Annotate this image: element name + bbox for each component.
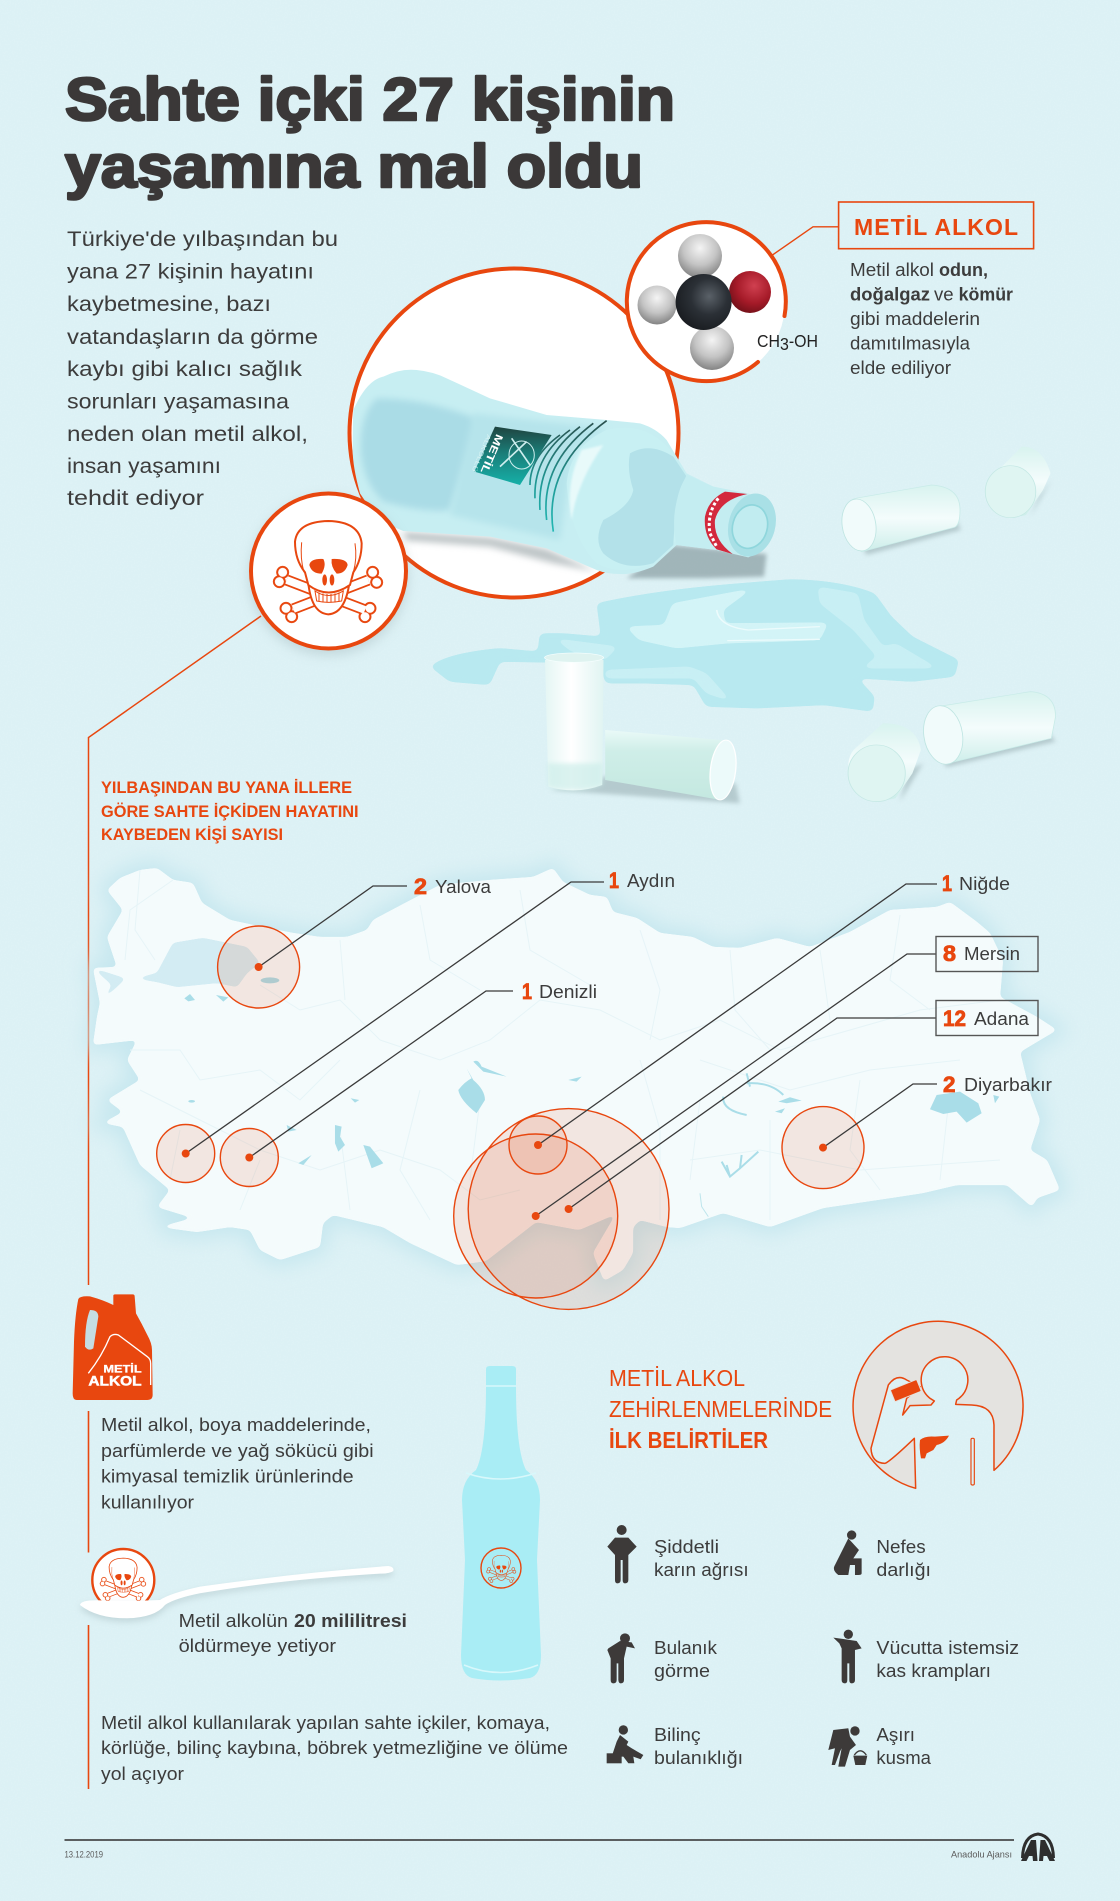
bottle shadow — [403, 532, 767, 578]
text: uses of methyl alcohol: parfümlerde ve yağ sökücü gibi — [101, 1440, 374, 1461]
intro text: kaybı gibi kalıcı sağlık — [67, 358, 303, 381]
bottle stripes — [530, 421, 607, 532]
metil alkol description: Metil alkol — [850, 260, 934, 280]
text: consequences: Metil alkol kullanılarak yapılan sahte içkiler, komaya, — [101, 1712, 550, 1733]
text: 20 millilitres: 20 mililitresi — [294, 1610, 407, 1631]
lakes east — [700, 1073, 999, 1217]
icon: skull badge on bottle — [481, 1548, 521, 1588]
location dots — [182, 963, 827, 1220]
glass: lying behind — [605, 730, 739, 801]
glass: far right short — [985, 447, 1051, 518]
symptoms heading — [609, 1365, 832, 1453]
text: 20 millilitres — [179, 1610, 407, 1656]
text: uses of methyl alcohol: kimyasal temizlik ürünlerinde — [101, 1466, 354, 1486]
icon: orange canister: ALKOL — [88, 1373, 142, 1389]
symptoms heading: ZEHİRLENMELERİNDE — [609, 1396, 832, 1422]
icon: spoon with skull circle — [80, 1549, 393, 1622]
molecule atoms — [638, 234, 771, 370]
icon: blurred vision — [607, 1633, 635, 1683]
footer: Anadolu Ajansı — [951, 1850, 1012, 1860]
text: consequences — [101, 1712, 568, 1784]
symptoms heading: METİL ALKOL — [609, 1365, 745, 1391]
map of Turkey — [93, 868, 1060, 1281]
glass shadows — [550, 480, 1056, 803]
text: uses of methyl alcohol: kullanılıyor — [101, 1492, 194, 1513]
map heading: KAYBEDEN KİŞİ SAYISI — [101, 826, 283, 844]
label: Aydın — [609, 868, 675, 893]
label: Diyarbakır: 2 — [943, 1072, 956, 1097]
title — [65, 66, 675, 200]
glass: lower short — [848, 723, 921, 802]
symptom labels: Nefes — [876, 1537, 926, 1557]
title: yaşamına mal oldu — [65, 133, 643, 200]
symptom labels: görme — [654, 1661, 710, 1681]
circle: Niğde — [509, 1116, 567, 1174]
intro text: tehdit ediyor — [67, 487, 204, 510]
text: consequences: yol açıyor — [101, 1763, 184, 1784]
glasses — [545, 447, 1056, 803]
label: Denizli: Denizli — [539, 982, 597, 1002]
label: Adana — [936, 1000, 1038, 1036]
symptom labels: darlığı — [876, 1560, 931, 1580]
text: uses of methyl alcohol — [101, 1414, 374, 1513]
text: 20 millilitres: Metil alkolün — [179, 1610, 288, 1631]
symptom labels: Bulanık — [654, 1638, 718, 1658]
symptom icons — [607, 1525, 867, 1767]
glass: lower right large — [920, 692, 1056, 766]
text: 20 millilitres: öldürmeye yetiyor — [179, 1635, 336, 1656]
map heading — [101, 779, 359, 844]
icon: confusion — [607, 1725, 643, 1763]
footer — [64, 1834, 1055, 1861]
metil alkol description: ve — [934, 284, 954, 304]
vertical line segments — [88, 1411, 90, 1789]
label: Denizli — [522, 979, 597, 1004]
label: Denizli: 1 — [522, 979, 532, 1004]
bottle label: ALKOLLÜ — [470, 433, 492, 473]
icon: skull — [273, 521, 383, 623]
icon: AA logo — [1021, 1834, 1055, 1861]
icon: person drinking with liver — [853, 1321, 1023, 1488]
label: Yalova: Yalova — [435, 877, 492, 897]
map heading: YILBAŞINDAN BU YANA İLLERE — [101, 779, 352, 797]
circle: Aydın — [157, 1124, 215, 1182]
label: Mersin — [936, 936, 1038, 972]
label: Adana: Adana — [974, 1009, 1030, 1029]
big white circle — [350, 268, 678, 598]
intro text: yana 27 kişinin hayatını — [67, 260, 314, 284]
icon: muscle cramps — [833, 1630, 862, 1683]
chemical formula: CH — [757, 331, 782, 351]
intro text — [67, 228, 338, 510]
molecule circle — [627, 222, 786, 382]
symptom labels — [654, 1537, 1019, 1768]
metil alkol description: damıtılmasıyla — [850, 334, 971, 354]
circle: Mersin — [454, 1134, 618, 1298]
intro text: vatandaşların da görme — [67, 326, 318, 349]
symptom labels: Şiddetli — [654, 1537, 719, 1557]
data circles — [157, 926, 864, 1309]
label: Yalova — [414, 874, 492, 899]
leader lines — [186, 882, 937, 1216]
intro text: insan yaşamını — [67, 455, 221, 478]
symptom labels: Vücutta istemsiz — [876, 1638, 1019, 1658]
metil alkol description: kömür — [959, 284, 1013, 304]
label: Niğde: Niğde — [959, 874, 1010, 894]
map heading: GÖRE SAHTE İÇKİDEN HAYATINI — [101, 802, 359, 821]
connector: skull to vertical line — [88, 616, 261, 1285]
metil alkol description: gibi maddelerin — [850, 309, 980, 329]
metil alkol description: doğalgaz — [850, 284, 930, 304]
intro text: kaybetmesine, bazı — [67, 293, 271, 316]
circle: Yalova — [218, 926, 300, 1008]
metil alkol description — [850, 260, 1013, 378]
symptom labels: bulanıklığı — [654, 1748, 743, 1768]
intro text: Türkiye'de yılbaşından bu — [67, 228, 338, 251]
tipped bottle — [353, 370, 783, 574]
symptom labels: Aşırı — [876, 1725, 915, 1745]
label: Yalova: 2 — [414, 874, 427, 899]
glass: standing — [545, 653, 604, 790]
text: uses of methyl alcohol: Metil alkol, boya maddelerinde, — [101, 1414, 371, 1435]
bottle label — [470, 427, 552, 485]
label: Mersin: 8 — [943, 941, 956, 966]
footer: 13.12.2019 — [64, 1850, 103, 1860]
label: Diyarbakır — [943, 1072, 1052, 1097]
intro text: sorunları yaşamasına — [67, 390, 289, 414]
label: Aydın: 1 — [609, 868, 619, 893]
circle: Diyarbakır — [782, 1107, 864, 1189]
glass: upper right lying — [839, 485, 960, 552]
symptoms heading: İLK BELİRTİLER — [609, 1427, 768, 1453]
icon: orange canister: METİL — [103, 1362, 142, 1375]
symptom labels: karın ağrısı — [654, 1560, 749, 1580]
label: Adana: 12 — [943, 1006, 966, 1031]
chemical formula: 3 — [780, 334, 789, 354]
icon: vomiting — [828, 1726, 867, 1767]
chemical formula: -OH — [789, 331, 818, 351]
bottle label: METİL — [477, 432, 506, 476]
label: Niğde — [942, 871, 1010, 896]
lakes west — [184, 977, 582, 1168]
symptom labels: kusma — [876, 1748, 932, 1768]
skull and crossbones circle — [250, 494, 408, 655]
connector: molecule to label — [771, 227, 839, 256]
title: Sahte içki 27 kişinin — [65, 66, 675, 133]
callout: metil alkol label — [839, 202, 1034, 249]
label: Mersin: Mersin — [964, 944, 1020, 964]
text: consequences: körlüğe, bilinç kaybına, böbrek yetmezliğine ve ölüme — [101, 1737, 568, 1758]
metil alkol description: elde ediliyor — [850, 358, 951, 378]
icon: orange canister — [73, 1294, 153, 1400]
metil alkol description: odun, — [939, 260, 988, 280]
puddle of spilled liquid — [431, 579, 959, 712]
label: Diyarbakır: Diyarbakır — [964, 1075, 1052, 1095]
intro text: neden olan metil alkol, — [67, 423, 308, 446]
icon: stomach pain — [607, 1525, 637, 1583]
callout: metil alkol label: METİL ALKOL — [854, 214, 1018, 240]
symptom labels: kas krampları — [876, 1661, 991, 1681]
label: Aydın: Aydın — [627, 871, 675, 891]
blue bottle — [461, 1366, 541, 1680]
circle: Adana — [468, 1109, 669, 1309]
circle: Denizli — [220, 1128, 278, 1186]
icon: shortness of breath — [834, 1530, 862, 1575]
symptom labels: Bilinç — [654, 1725, 701, 1745]
label: Niğde: 1 — [942, 871, 952, 896]
